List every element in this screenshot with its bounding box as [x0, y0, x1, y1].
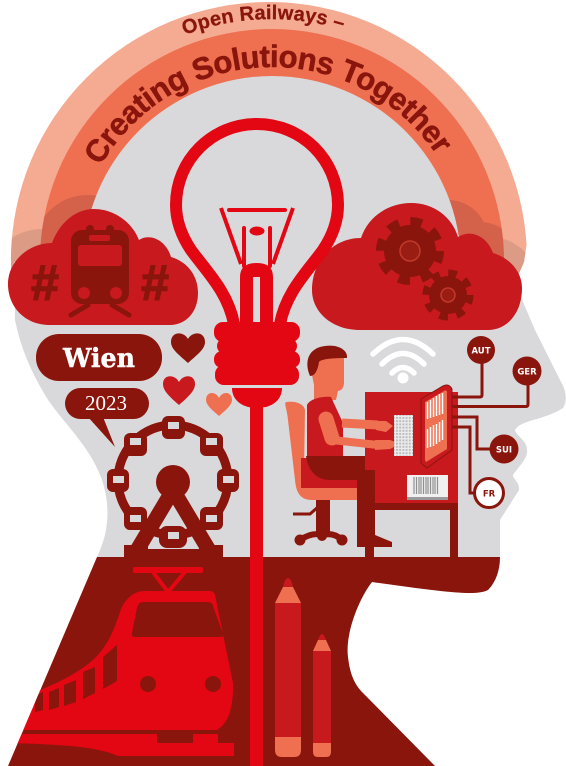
label: GER node	[512, 356, 542, 386]
icon: orange heart	[206, 393, 232, 416]
label: 2023 speech bubble	[65, 388, 149, 447]
icon: person at terminal	[306, 346, 400, 547]
icon: light bulb	[176, 124, 338, 766]
icon: document with barcode	[407, 475, 448, 500]
icon: large pencil	[275, 578, 301, 757]
panel: right cloud with gears	[312, 203, 522, 330]
label: AUT node	[467, 336, 495, 364]
icon: keypad	[394, 415, 413, 456]
icon: monitor	[421, 385, 452, 468]
title: Creating Solutions Together: Creating Solutions Together	[86, 44, 450, 162]
panel: grey head	[14, 76, 566, 557]
panel: left cloud with train	[8, 209, 198, 325]
icon: left hash: #	[31, 255, 59, 311]
panel: desk	[365, 392, 458, 557]
icon: red heart	[163, 376, 195, 405]
label: FR node	[474, 478, 504, 508]
label: FR node: FR	[483, 490, 496, 500]
icon: wifi	[373, 340, 433, 384]
icon: network connection lines	[452, 362, 528, 493]
label: SUI node	[490, 434, 518, 464]
label: Wien pill	[36, 334, 162, 381]
label: GER node: GER	[517, 368, 537, 378]
panel: dark neck and shoulders	[8, 557, 500, 766]
icon: dark heart	[171, 333, 205, 363]
icon: ferris wheel	[107, 416, 239, 557]
icon: red train	[0, 567, 234, 756]
icon: large gear	[381, 222, 439, 280]
label: 2023 speech bubble: 2023	[85, 391, 127, 415]
panel: arch bands	[11, 2, 526, 274]
label: Wien pill: Wien	[62, 344, 135, 374]
icon: small gear	[426, 274, 470, 316]
icon: small pencil	[313, 634, 331, 757]
label: SUI node: SUI	[496, 446, 512, 456]
label: AUT node: AUT	[471, 346, 491, 356]
icon: right hash: #	[141, 255, 169, 311]
icon: train front	[71, 225, 129, 315]
subtitle: Open Railways: Open Railways –	[182, 4, 344, 34]
icon: office chair	[285, 402, 358, 546]
